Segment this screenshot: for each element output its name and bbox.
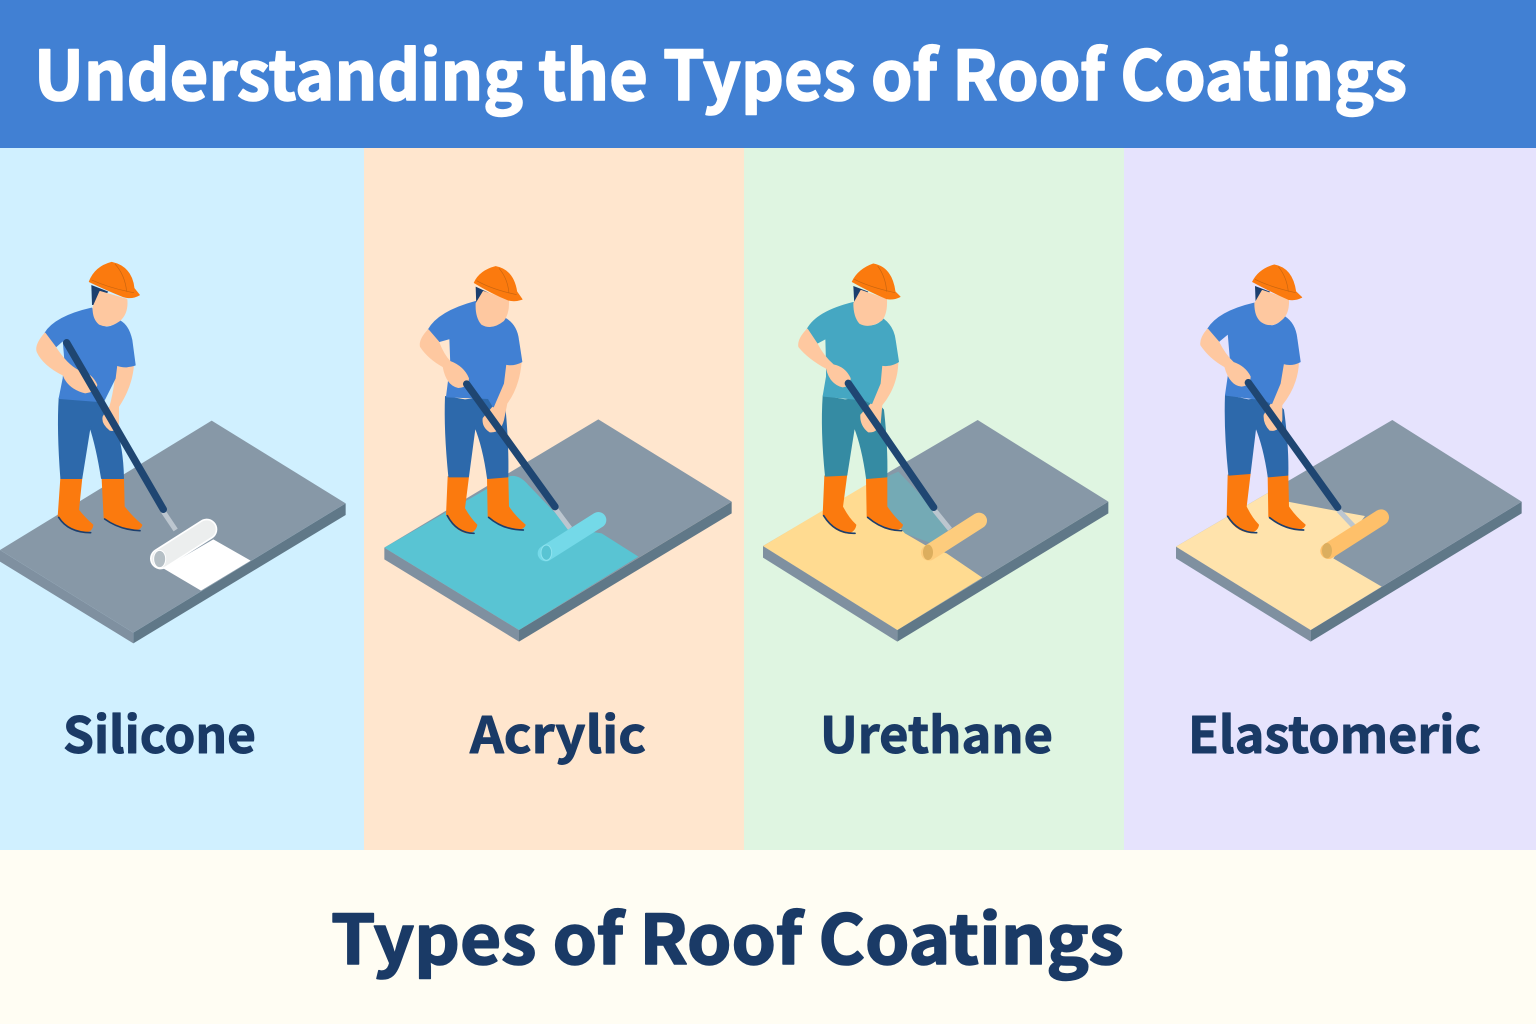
roof slab: acrylic [384, 419, 732, 642]
worker: silicone [37, 262, 176, 533]
footer band [0, 850, 1536, 1024]
panel: urethane background [744, 148, 1124, 850]
teal coating [384, 476, 638, 630]
illustration: acrylic roof and worker [384, 267, 732, 642]
illustration: elastomeric roof and worker [1176, 265, 1522, 642]
worker: elastomeric [1201, 265, 1353, 533]
yellow coating [763, 485, 982, 630]
roof slab: elastomeric [1176, 420, 1522, 642]
paint roller: silicone [154, 529, 207, 568]
paint roller: elastomeric [1322, 517, 1381, 558]
footer heading: Types of Roof Coatings [331, 885, 1124, 984]
worker: urethane [799, 264, 950, 533]
panel: acrylic background [364, 148, 744, 850]
worker: acrylic [420, 267, 570, 533]
roof slab: urethane [763, 420, 1108, 642]
title: Understanding the Types of Roof Coatings [34, 21, 1407, 120]
label: Acrylic: Acrylic [469, 696, 646, 768]
cream coating [1176, 492, 1382, 630]
label: Elastomeric: Elastomeric [1188, 696, 1481, 768]
translucent teal wet coat [887, 472, 950, 543]
paint roller: urethane [923, 521, 979, 560]
label: Silicone: Silicone [63, 696, 256, 768]
illustration: urethane roof and worker [763, 264, 1108, 642]
roof slab: silicone [0, 421, 346, 643]
panel: silicone background [0, 148, 364, 850]
panel: elastomeric background [1124, 148, 1536, 850]
paint roller: acrylic [541, 520, 598, 560]
label: Urethane: Urethane [820, 696, 1053, 768]
white coating strip [163, 539, 251, 591]
illustration: silicone roof and worker [0, 262, 346, 643]
header band [0, 0, 1536, 148]
